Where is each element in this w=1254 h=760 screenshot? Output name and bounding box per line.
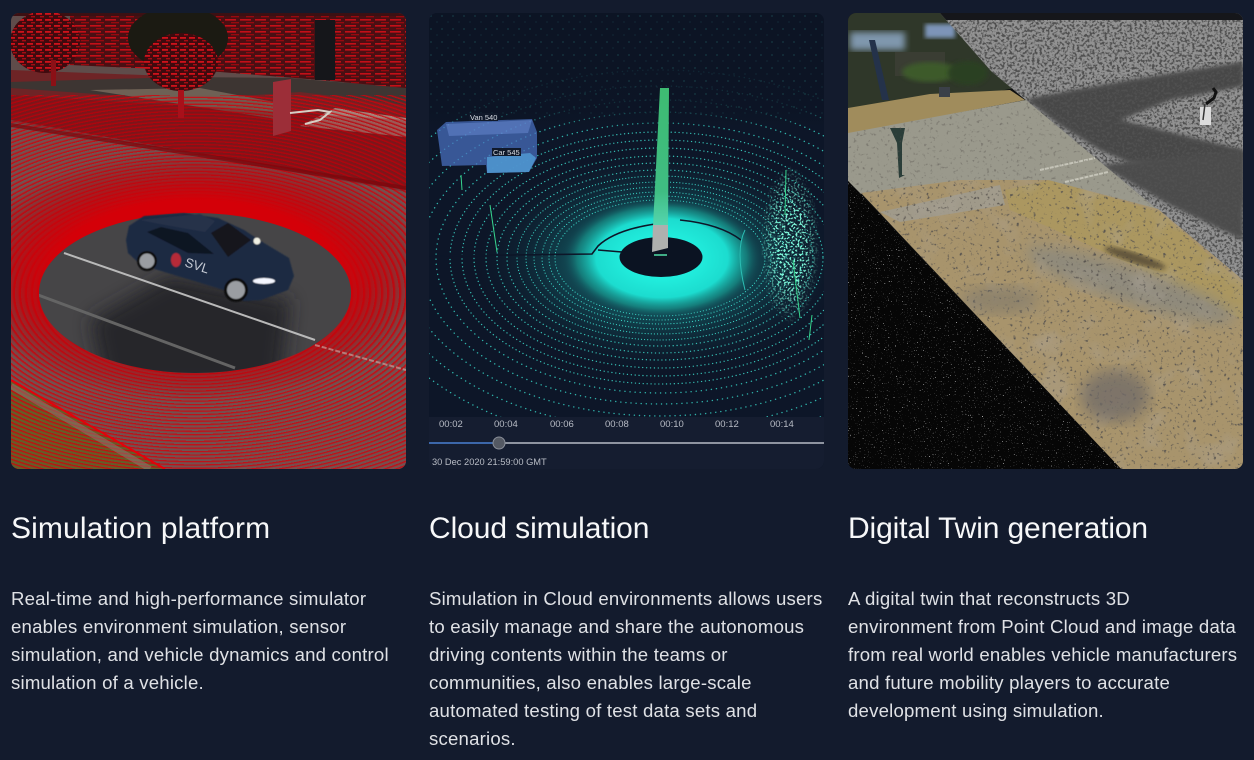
timeline: 00:04 <box>494 419 518 430</box>
paved road <box>848 100 1156 208</box>
sand ground <box>848 170 1243 470</box>
description: enables environment simulation, sensor <box>11 616 346 637</box>
description: environment from Point Cloud and image data <box>848 616 1236 637</box>
image: digital twin point cloud <box>848 13 1243 469</box>
description: simulation of a vehicle. <box>11 672 204 693</box>
description: communities, also enables large-scale <box>429 672 752 693</box>
description: Simulation in Cloud environments allows users <box>429 588 822 609</box>
bounding boxes: Car 545 <box>493 148 520 157</box>
heading: Digital Twin generation <box>848 512 1148 545</box>
description: to easily manage and share the autonomous <box>429 616 804 637</box>
central black hole <box>620 237 702 277</box>
image: cyan point cloud <box>429 13 824 467</box>
point cloud rings <box>360 70 960 446</box>
panel: digital twin generation <box>848 13 1243 721</box>
upper ground <box>11 70 406 190</box>
timeline: 00:02 <box>439 419 463 430</box>
image: car with red lidar rings: SVL <box>183 255 211 276</box>
curb marking <box>290 110 330 124</box>
timeline: 00:08 <box>605 419 629 430</box>
car <box>126 213 294 302</box>
heading: Cloud simulation <box>429 512 649 545</box>
panel: simulation platform <box>11 13 406 693</box>
description: driving contents within the teams or <box>429 644 728 665</box>
heading: Simulation platform <box>11 512 270 545</box>
description <box>848 588 1237 721</box>
scan shadow line <box>429 220 741 256</box>
description: and future mobility players to accurate <box>848 672 1170 693</box>
description: scenarios. <box>429 728 516 749</box>
description: A digital twin that reconstructs 3D <box>848 588 1130 609</box>
description: Real-time and high-performance simulator <box>11 588 366 609</box>
timeline: 00:06 <box>550 419 574 430</box>
timeline <box>429 417 824 469</box>
timeline: 00:12 <box>715 419 739 430</box>
trees <box>10 11 80 86</box>
upper left scene <box>848 13 1025 134</box>
description: simulation, and vehicle dynamics and control <box>11 644 389 665</box>
panel: cloud simulation <box>429 13 824 749</box>
black wedge <box>848 181 1121 469</box>
gray point cloud <box>940 13 1243 280</box>
image: car with red lidar rings <box>11 13 406 469</box>
ground hole <box>39 213 351 373</box>
description: development using simulation. <box>848 700 1104 721</box>
description: automated testing of test data sets and <box>429 700 757 721</box>
vehicle <box>652 225 668 252</box>
timeline: 30 Dec 2020 21:59:00 GMT <box>432 457 547 467</box>
description: from real world enables vehicle manufacturers <box>848 644 1237 665</box>
cyan glow <box>562 198 762 318</box>
foliage points <box>461 160 824 340</box>
wall <box>70 13 406 88</box>
top sparse field <box>429 13 824 128</box>
description <box>429 588 822 749</box>
bounding boxes <box>437 113 537 173</box>
road <box>11 120 406 469</box>
timeline: 00:10 <box>660 419 684 430</box>
bounding boxes: Van 540 <box>470 113 497 122</box>
green beam <box>653 88 669 226</box>
timeline: 00:14 <box>770 419 794 430</box>
description <box>11 588 389 693</box>
pillar <box>273 79 291 136</box>
